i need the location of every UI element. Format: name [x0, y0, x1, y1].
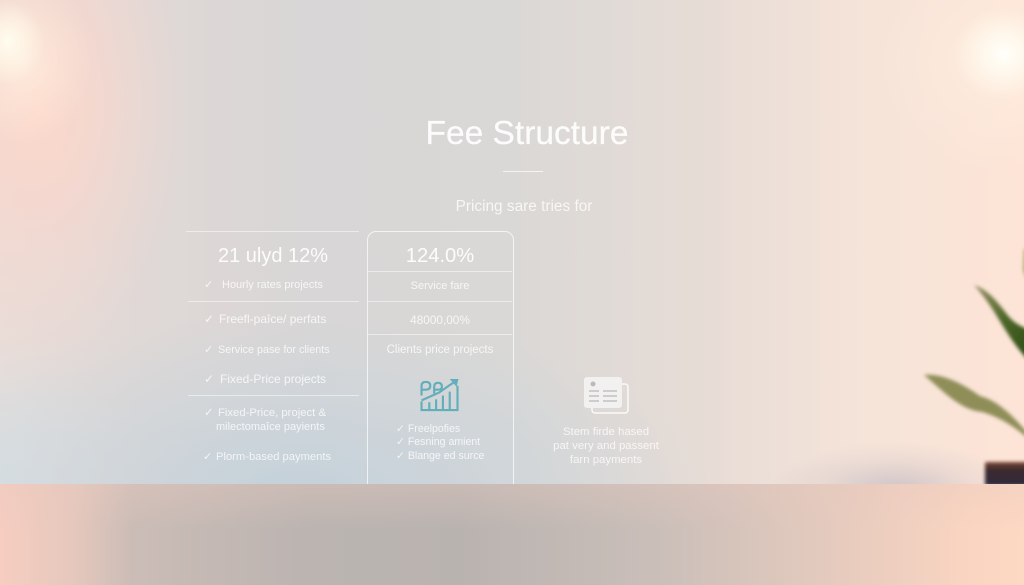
icon: stacked documents — [584, 377, 629, 414]
item: hourly rates: ✓ — [204, 279, 213, 291]
card price heading: 124.0% — [406, 245, 474, 267]
third column text: pat very and passent — [553, 440, 659, 452]
item: milestone payments: milectomaîce payients — [216, 421, 325, 433]
dark leaf — [974, 285, 1024, 362]
card checklist: ✓ Fesning amient — [396, 436, 480, 448]
item: fixed price: ✓ — [204, 372, 214, 386]
pot — [985, 462, 1024, 486]
top leaf tip — [1023, 245, 1024, 288]
title divider — [503, 171, 543, 172]
item: milestone payments: Fixed-Price, project & — [218, 407, 326, 419]
item: milestone payments: ✓ — [204, 407, 213, 419]
item: hourly rates: Hourly rates projects — [222, 279, 323, 291]
panel: highlighted plan card — [367, 231, 514, 484]
service fare row: Service fare — [411, 280, 469, 292]
card checklist: ✓ Freelpofies — [396, 423, 460, 435]
panel: third column — [553, 377, 659, 466]
item: platform payments: Plorm-based payments — [216, 451, 331, 463]
icon: growth chart — [420, 379, 459, 412]
item: service pass: Service pase for clients — [218, 344, 330, 356]
third column text: Stem firde hased — [563, 426, 649, 438]
plan price heading: 21 ulyd 12% — [218, 245, 328, 267]
card checklist — [396, 423, 484, 462]
item: fixed parcel: Freefl-paîce/ perfats — [219, 312, 326, 326]
card checklist: ✓ Blange ed surce — [396, 450, 484, 462]
panel: left plan column — [186, 231, 359, 463]
item: service pass: ✓ — [204, 344, 213, 356]
plant — [923, 247, 1024, 484]
light leaf — [924, 375, 1024, 440]
item: milestone payments — [204, 407, 326, 433]
subtitle: Pricing sare tries for — [456, 198, 592, 215]
column top rule — [186, 231, 359, 232]
shelf — [0, 484, 1024, 585]
third column text: farn payments — [570, 454, 642, 466]
item: fixed price: Fixed-Price projects — [220, 372, 326, 386]
item: fixed parcel: ✓ — [204, 312, 214, 326]
clients row: Clients price projects — [387, 344, 493, 356]
title: Fee Structure — [426, 115, 628, 152]
amount row: 48000,00% — [410, 313, 470, 327]
item: platform payments: ✓ — [203, 451, 212, 463]
third column text — [553, 426, 659, 466]
